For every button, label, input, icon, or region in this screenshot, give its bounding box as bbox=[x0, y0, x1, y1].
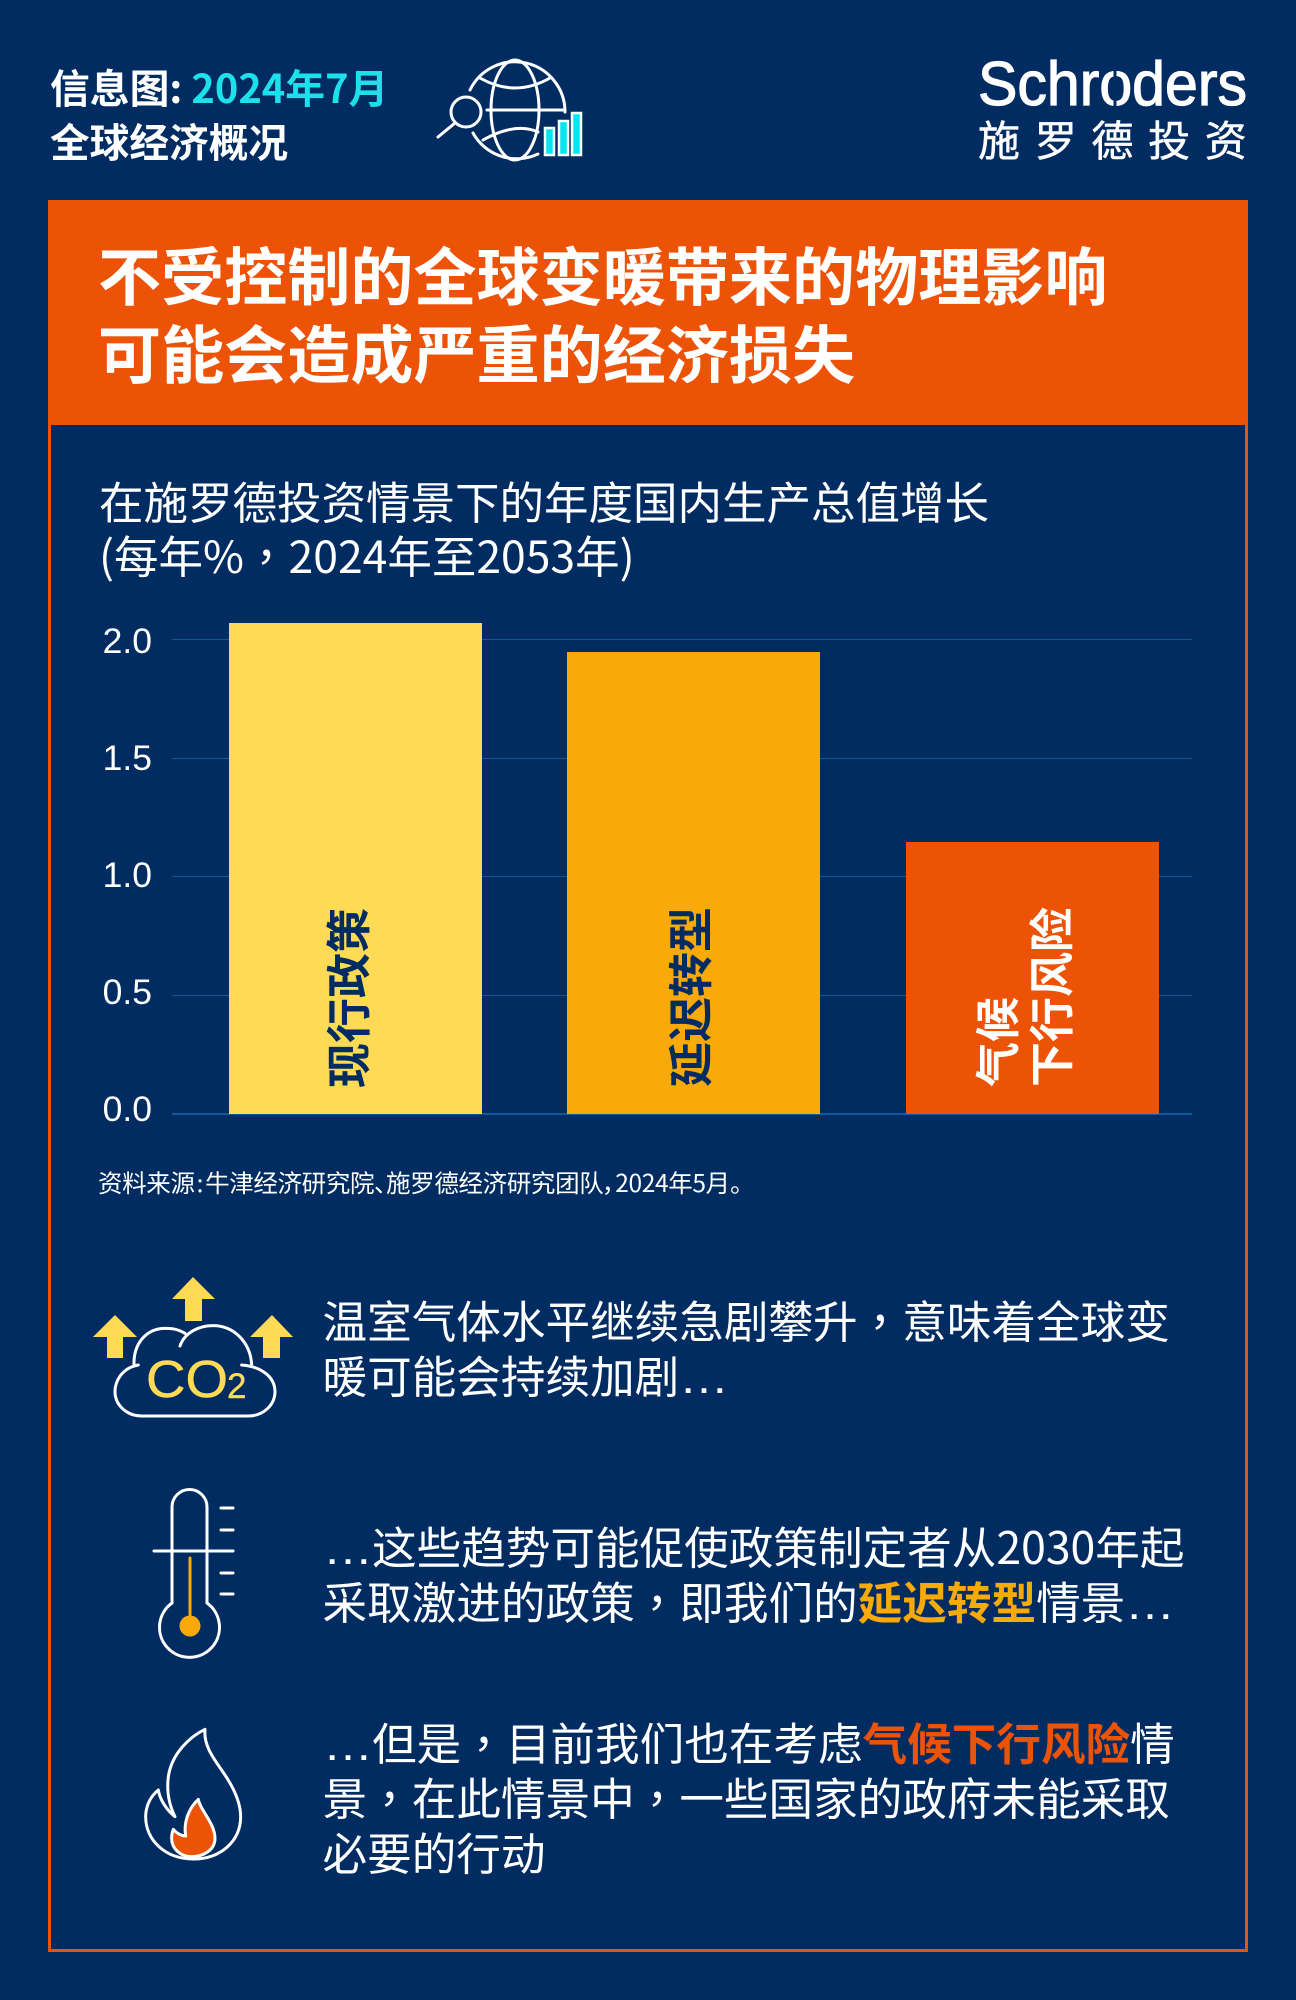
bar chart: annual GDP growth by scenario bbox=[103, 620, 1192, 1129]
panel: orange title banner bbox=[48, 200, 1248, 425]
bar: climate downside risk bbox=[906, 842, 1159, 1114]
title: 可能会造成严重的经济损失 bbox=[98, 306, 855, 396]
bar: climate downside risk: 下行风险 bbox=[1016, 907, 1081, 1087]
text block: greenhouse gases: … bbox=[679, 1354, 729, 1402]
chart heading: (每年%，2024年至2053年) bbox=[99, 521, 635, 586]
title: 不受控制的全球变暖带来的物理影响 bbox=[98, 228, 1108, 318]
chart heading bbox=[99, 467, 989, 586]
title bbox=[98, 228, 1108, 396]
y axis labels: 0.0 bbox=[103, 1089, 152, 1129]
text block: policy makers bbox=[322, 1512, 1184, 1632]
text block: greenhouse gases: 温室气体水平继续急剧攀升，意味着全球变 bbox=[322, 1286, 1170, 1350]
y axis labels: 1.5 bbox=[103, 738, 152, 778]
text block: climate downside risk: 但是，目前我们也在考虑气候下行风险情 bbox=[372, 1708, 1175, 1773]
header: infographic date and topic bbox=[50, 58, 388, 169]
text block: climate downside risk: … bbox=[322, 1721, 372, 1770]
logo: Schroders: 施罗德投资 bbox=[978, 108, 1262, 169]
bar: delayed transition: 延迟转型 bbox=[655, 907, 720, 1087]
icon: CO2 cloud with arrows bbox=[93, 1277, 293, 1418]
y axis labels: 1.0 bbox=[103, 855, 152, 895]
icon: globe with magnifier and bars bbox=[436, 58, 582, 162]
logo: Schroders bbox=[978, 50, 1262, 169]
text block: greenhouse gases: 暖可能会持续加剧 bbox=[322, 1340, 679, 1406]
icon: CO2 cloud with arrows: 2 bbox=[227, 1367, 246, 1406]
heading: date line: 信息图: 2024年7月 bbox=[50, 58, 388, 115]
y axis labels bbox=[103, 620, 152, 1129]
source note: 资料来源:牛津经济研究院、施罗德经济研究团队，2024年5月。 bbox=[98, 1165, 742, 1200]
heading: global economic overview: 全球经济概况 bbox=[50, 112, 288, 169]
chart heading: 在施罗德投资情景下的年度国内生产总值增长 bbox=[99, 467, 989, 532]
y axis labels: 2.0 bbox=[103, 620, 152, 660]
text block: greenhouse gases bbox=[322, 1286, 1170, 1406]
text block: policy makers: 采取激进的政策，即我们的延迟转型情景 bbox=[322, 1567, 1125, 1632]
y axis labels: 0.5 bbox=[103, 972, 152, 1012]
icon: CO2 cloud with arrows: CO bbox=[146, 1351, 228, 1409]
bar: climate downside risk: 气候 bbox=[962, 997, 1027, 1087]
text block: climate downside risk: 景，在此情景中，一些国家的政府未能采取 bbox=[322, 1763, 1170, 1828]
bar: delayed transition bbox=[567, 652, 820, 1114]
bar: current policy: 现行政策 bbox=[313, 908, 378, 1088]
text block: policy makers: 这些趋势可能促使政策制定者从2030年起 bbox=[372, 1512, 1184, 1577]
bar: current policy bbox=[229, 623, 482, 1114]
icon: flame bbox=[144, 1728, 242, 1860]
icon: thermometer bbox=[152, 1488, 234, 1659]
text block: climate downside risk: 必要的行动 bbox=[322, 1818, 545, 1883]
text block: policy makers: … bbox=[322, 1525, 372, 1574]
text block: policy makers: … bbox=[1125, 1580, 1175, 1629]
text block: climate downside risk bbox=[322, 1708, 1175, 1883]
